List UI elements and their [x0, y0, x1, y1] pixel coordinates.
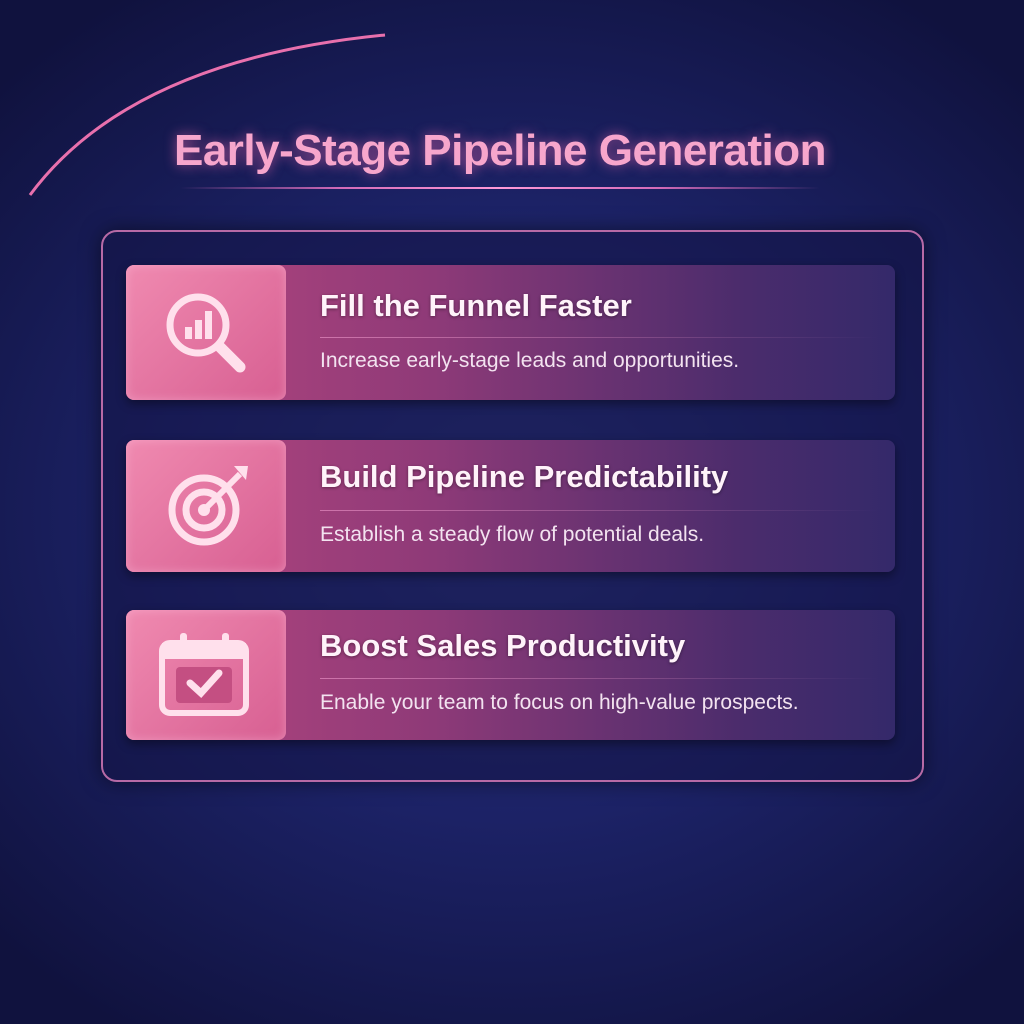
decorative arc [28, 34, 386, 196]
icon: magnifier chart [126, 265, 286, 400]
icon: calendar check [126, 610, 286, 740]
text: Establish a steady flow of potential deals. [320, 523, 704, 546]
card: productivity [126, 610, 895, 740]
panel: benefits [101, 230, 924, 782]
icon: target [126, 440, 286, 572]
heading: Boost Sales Productivity [320, 628, 685, 663]
text: Enable your team to focus on high-value prospects. [320, 691, 799, 714]
card: predictability [126, 440, 895, 572]
heading: Fill the Funnel Faster [320, 288, 632, 323]
card: fill the funnel [126, 265, 895, 400]
text: Increase early-stage leads and opportunities. [320, 349, 739, 372]
heading: Build Pipeline Predictability [320, 459, 728, 494]
title: Early-Stage Pipeline Generation [174, 126, 826, 175]
